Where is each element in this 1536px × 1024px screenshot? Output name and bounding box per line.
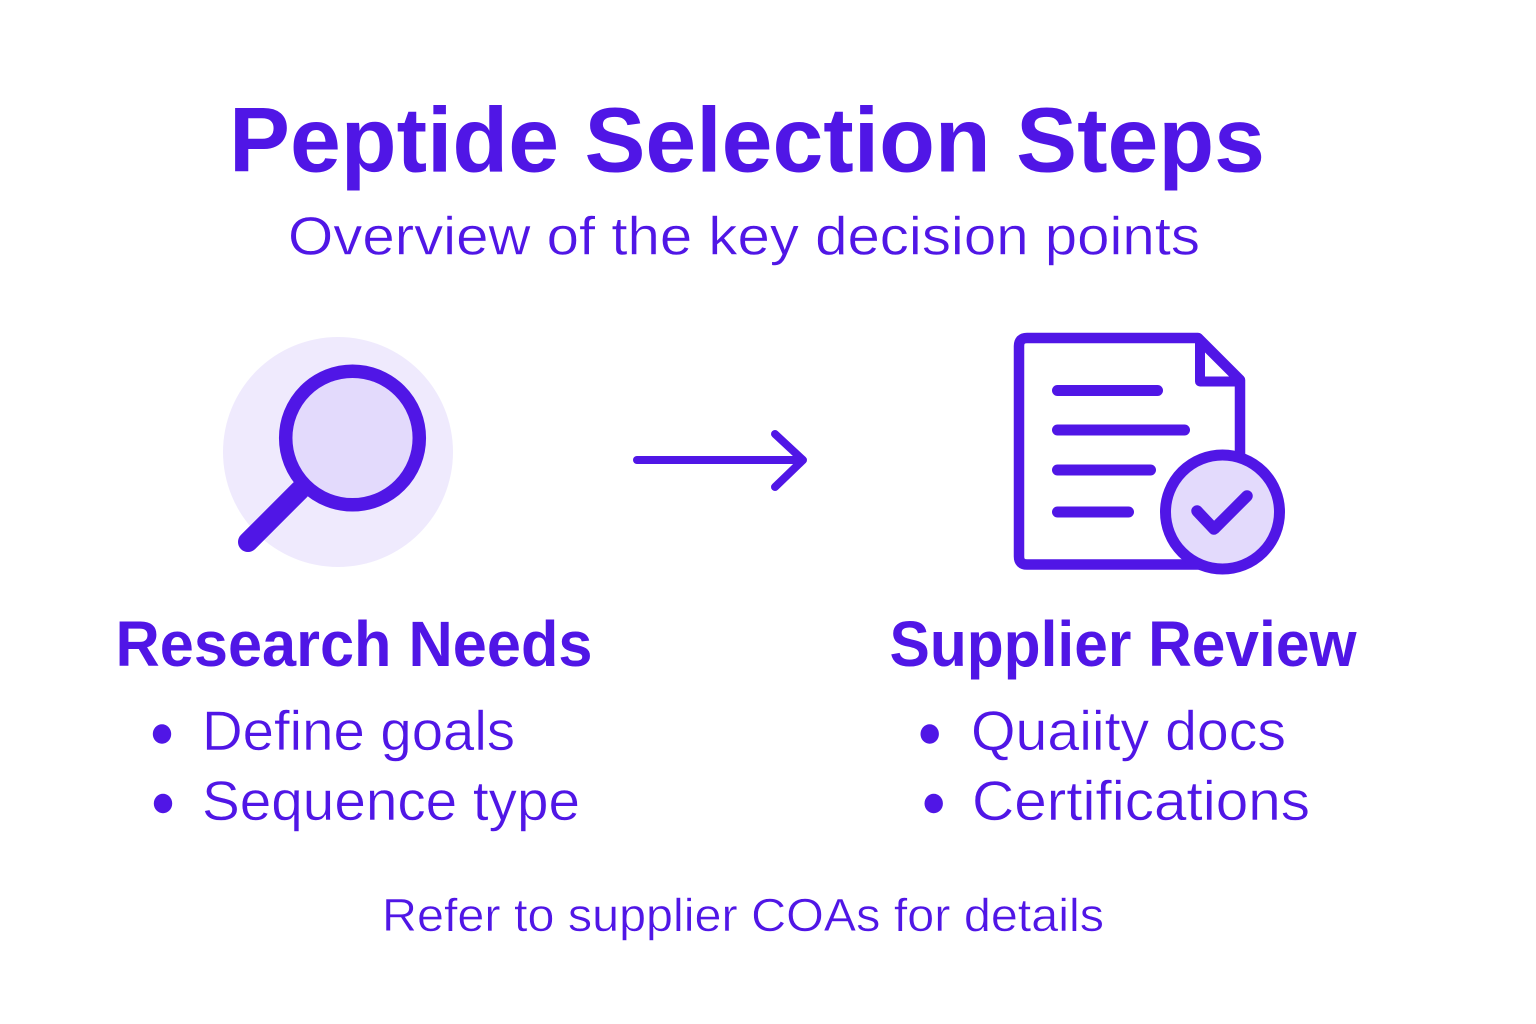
- heading: research needs: Research Needs: [116, 608, 592, 680]
- title: Peptide Selection Steps: [229, 90, 1265, 192]
- heading: supplier review: Supplier Review: [890, 608, 1357, 680]
- list: supplier review: Quaiity docs: [971, 700, 1286, 762]
- list: supplier review: Certifications: [972, 770, 1310, 832]
- list: research needs: Sequence type: [202, 770, 580, 832]
- list: supplier review: [920, 700, 1310, 832]
- arrow: [637, 434, 803, 487]
- icon: magnifying glass: [223, 337, 453, 567]
- footer note: Refer to supplier COAs for details: [382, 889, 1104, 941]
- list: research needs: [153, 700, 580, 832]
- list: research needs: Define goals: [202, 700, 515, 762]
- subtitle: Overview of the key decision points: [288, 206, 1200, 266]
- icon: document with check: [1019, 338, 1280, 569]
